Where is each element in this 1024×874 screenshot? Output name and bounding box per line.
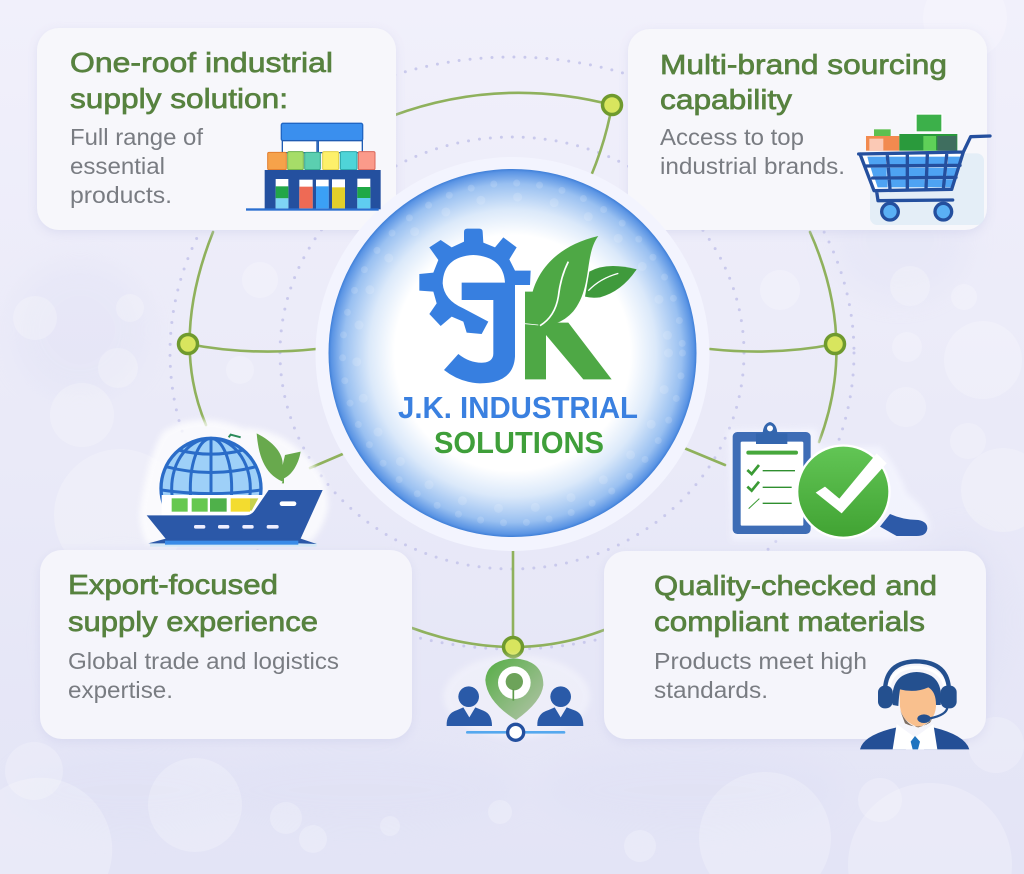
dotted orbit rings xyxy=(170,57,854,649)
heading: export: Export-focused xyxy=(68,569,278,600)
logo text: J.K. Industrial: J.K. INDUSTRIAL xyxy=(398,390,638,425)
heading: multi-brand: Multi-brand sourcing xyxy=(660,49,947,80)
node: bottom xyxy=(504,638,522,656)
logo: gear J and leaf K xyxy=(419,229,637,383)
heading line 2: compliant materials xyxy=(654,606,925,637)
body line 2: standards. xyxy=(654,677,768,703)
icon: clipboard with green check xyxy=(728,422,930,540)
center emblem xyxy=(316,157,710,551)
logo text: Solutions: SOLUTIONS xyxy=(434,425,604,460)
node: top right xyxy=(602,96,622,114)
panel: export-focused supply experience xyxy=(40,550,412,739)
node: left xyxy=(178,334,198,354)
body line 2: essential xyxy=(70,153,165,179)
panel: quality-checked and compliant materials xyxy=(604,551,986,739)
icon: customer support agent xyxy=(860,661,969,749)
body line 3: products. xyxy=(70,182,172,208)
body line 1: Full range of xyxy=(70,124,204,150)
panel: one-roof industrial supply solution xyxy=(37,28,396,230)
body line 2: industrial brands. xyxy=(660,153,845,179)
icon: location pin and two people xyxy=(443,655,590,740)
body line 1: Access to top xyxy=(660,124,804,150)
icon: storage shelf xyxy=(246,123,381,211)
heading line 2: capability xyxy=(660,84,792,115)
icon: cargo ship and globe xyxy=(140,420,328,547)
body line 1: Global trade and logistics xyxy=(68,648,339,674)
icon: shopping cart xyxy=(859,114,990,225)
panel: multi-brand sourcing capability xyxy=(628,29,987,230)
node: right xyxy=(826,334,844,354)
heading: one-roof: One-roof industrial xyxy=(70,47,333,78)
body line 1: Products meet high xyxy=(654,648,867,674)
card shadow layer xyxy=(37,31,987,742)
heading line 2: supply solution: xyxy=(70,83,288,114)
body line 2: expertise. xyxy=(68,677,173,703)
connector lines xyxy=(188,93,836,647)
heading: quality: Quality-checked and xyxy=(654,570,937,601)
heading line 2: supply experience xyxy=(68,606,318,637)
